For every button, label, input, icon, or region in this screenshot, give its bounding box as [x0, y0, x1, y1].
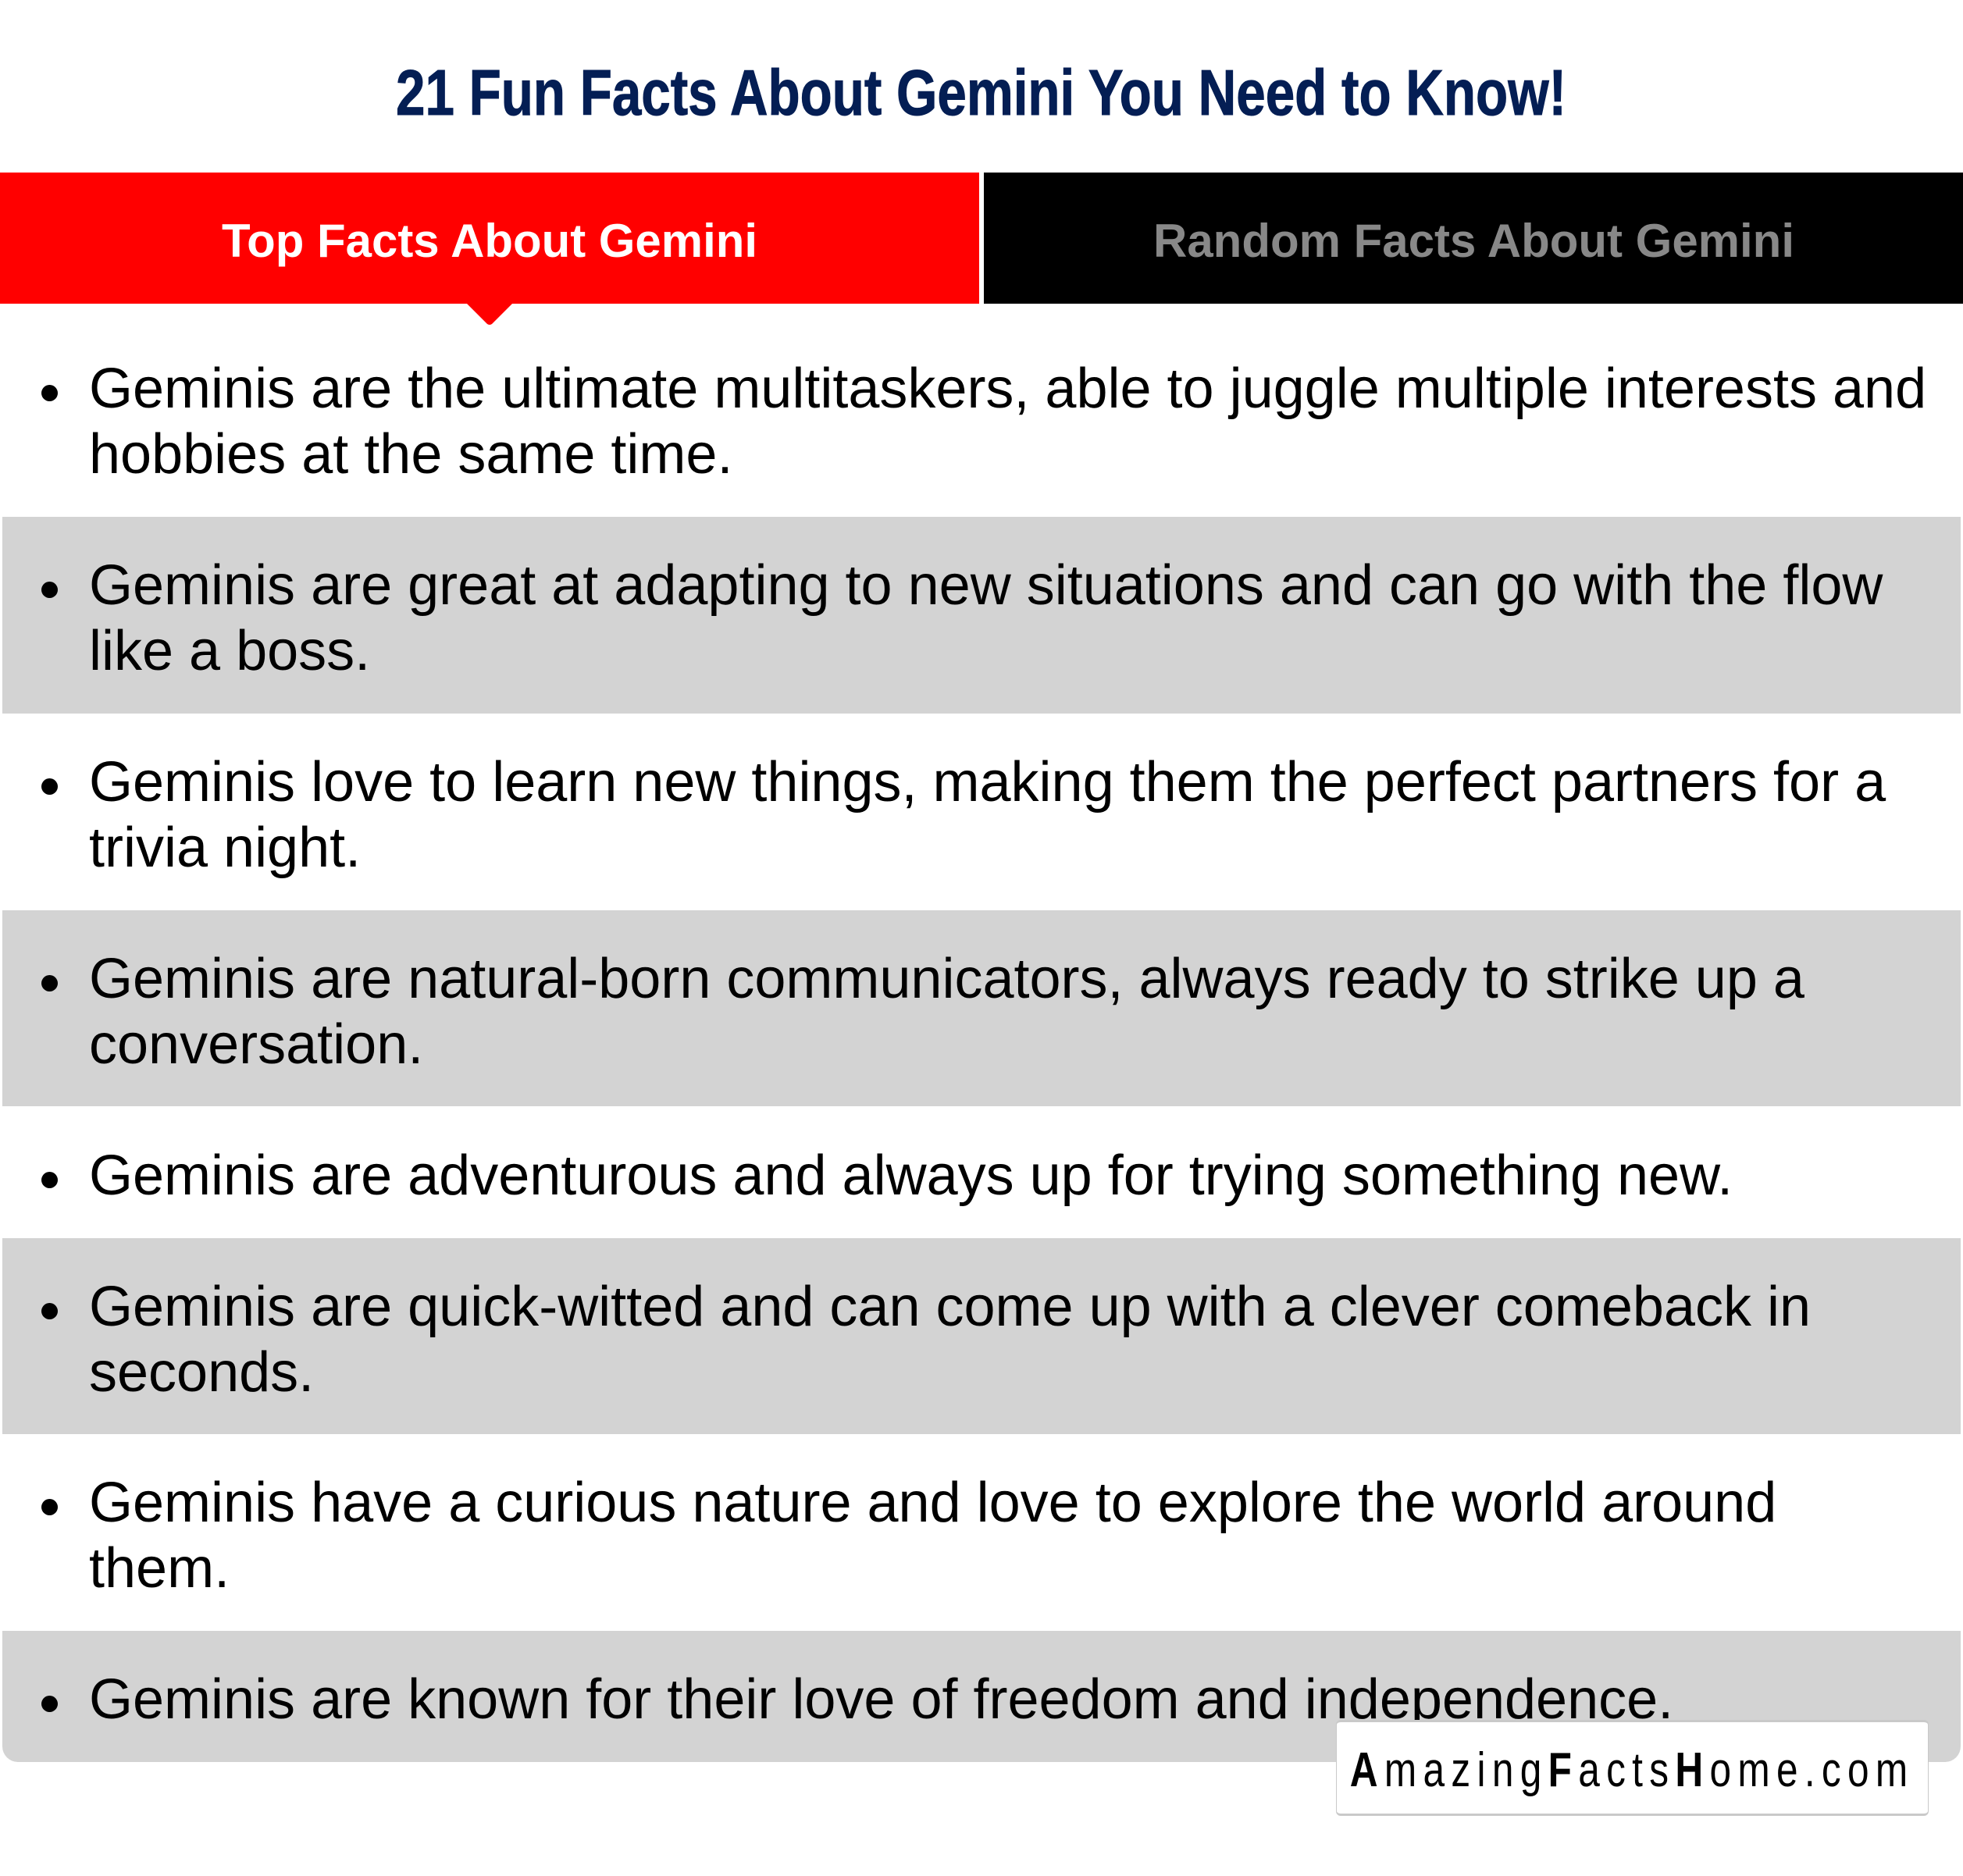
fact row 8: Geminis are known for their love of freedom and independence.	[89, 1668, 1673, 1731]
fact row 4: Geminis are natural-born communicators, always ready to strike up a	[89, 948, 1804, 1010]
fact row 2: Geminis are great at adapting to new situations and can go with the flow	[89, 554, 1883, 617]
title: 21 Fun Facts About Gemini You Need to Know!	[396, 56, 1566, 129]
fact row 4: conversation.	[89, 1013, 423, 1076]
tab: top facts (active): Top Facts About Gemini	[222, 215, 757, 267]
fact row 4	[2, 910, 1961, 1106]
fact row 3: trivia night.	[89, 817, 361, 879]
watermark badge: AmazingFactsHome.com	[1350, 1743, 1908, 1796]
fact row 1	[41, 358, 1926, 486]
fact row 6	[2, 1238, 1961, 1434]
fact row 8	[2, 1631, 1961, 1762]
fact row 1: Geminis are the ultimate multitaskers, able to juggle multiple interests and	[89, 358, 1926, 420]
fact row 2	[2, 517, 1961, 714]
tab: random facts (inactive): Random Facts About Gemini	[1153, 215, 1794, 267]
tab: top facts (active)	[0, 173, 979, 304]
fact row 5: Geminis are adventurous and always up for trying something new.	[89, 1144, 1733, 1207]
fact row 6: seconds.	[89, 1341, 314, 1404]
fact row 2: like a boss.	[89, 620, 370, 682]
watermark badge	[1336, 1720, 1929, 1816]
fact row 7	[41, 1472, 1776, 1600]
fact row 6: Geminis are quick-witted and can come up with a clever comeback in	[89, 1276, 1811, 1338]
fact row 1: hobbies at the same time.	[89, 423, 732, 486]
fact row 7: Geminis have a curious nature and love to explore the world around	[89, 1472, 1776, 1534]
tab pointer arrow	[467, 304, 512, 325]
tab: random facts (inactive)	[984, 173, 1963, 304]
fact row 3: Geminis love to learn new things, making them the perfect partners for a	[89, 751, 1886, 813]
fact row 3	[41, 751, 1886, 879]
fact row 7: them.	[89, 1537, 230, 1600]
